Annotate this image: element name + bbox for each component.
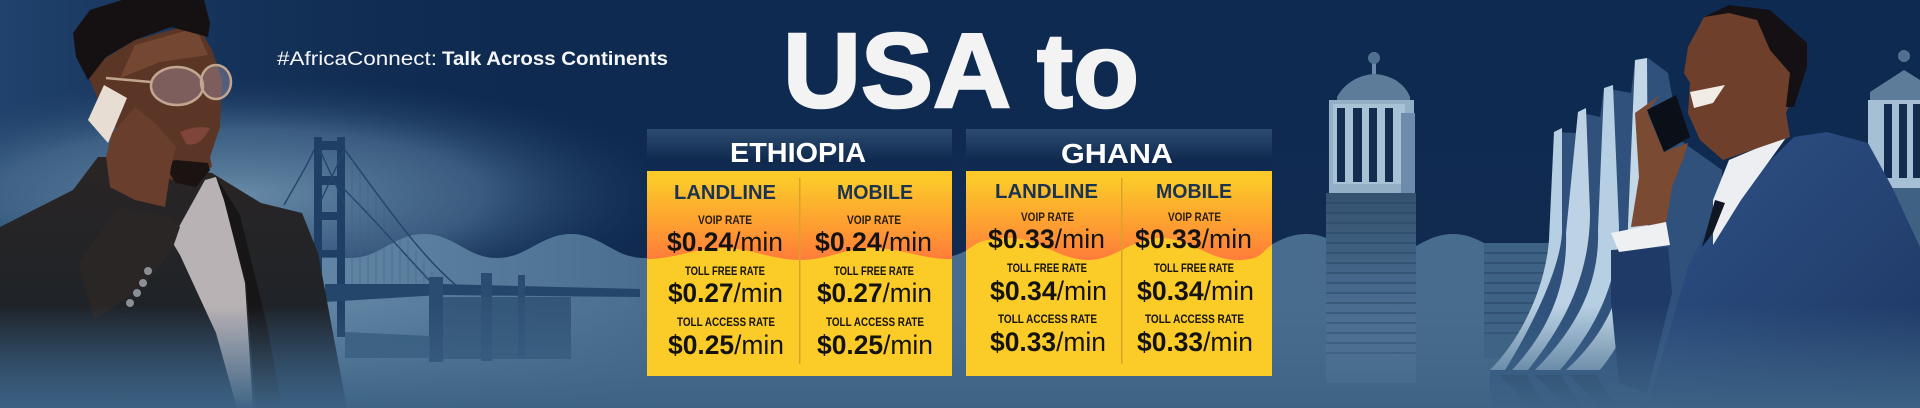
face and neck [86, 23, 222, 180]
Ghana landline column: $0.34/min [990, 276, 1107, 306]
forearm sleeve [78, 207, 180, 320]
Ghana header: GHANA [1061, 138, 1173, 169]
coat [0, 157, 347, 408]
Ethiopia mobile column: VOIP RATE [847, 215, 901, 227]
Ethiopia header [647, 129, 952, 171]
face [1684, 10, 1796, 160]
Ethiopia landline column: TOLL ACCESS RATE [677, 317, 775, 329]
Ghana landline column: VOIP RATE [1021, 212, 1074, 224]
illustration: Ethiopian tower right [1868, 50, 1920, 368]
Ghana landline column: $0.33/min [990, 327, 1106, 357]
hand [106, 107, 176, 207]
phone [88, 85, 127, 143]
background: left sky glow [0, 0, 680, 315]
Ethiopia mobile column: TOLL ACCESS RATE [826, 317, 924, 329]
Ghana card background [966, 171, 1272, 376]
Ghana mobile column: TOLL FREE RATE [1154, 263, 1234, 275]
Ghana landline column: TOLL FREE RATE [1007, 263, 1087, 275]
smile [1690, 85, 1725, 108]
Ethiopia mobile column: TOLL FREE RATE [834, 266, 914, 278]
tagline: Talk Across Continents [442, 49, 668, 70]
hair [1704, 5, 1807, 107]
cuff [1611, 222, 1670, 252]
Ghana mobile column: MOBILE [1156, 181, 1232, 203]
Ethiopia landline column: TOLL FREE RATE [685, 266, 765, 278]
forehead highlight [120, 28, 208, 78]
Ethiopia landline column [667, 182, 784, 360]
Ethiopia landline column: LANDLINE [674, 182, 776, 204]
panel: Ethiopia rates [647, 129, 952, 376]
Ethiopia mobile column: $0.24/min [815, 227, 932, 257]
background: wave band [0, 234, 1920, 408]
Ghana mobile column: $0.34/min [1137, 276, 1254, 306]
Ghana landline column: LANDLINE [995, 181, 1098, 203]
Ethiopia landline column: VOIP RATE [698, 215, 752, 227]
glasses [106, 65, 231, 105]
phone [1647, 95, 1690, 152]
illustration: Ethiopian low building [1484, 243, 1556, 358]
Ghana landline column [988, 181, 1107, 357]
person: right man on phone [1611, 5, 1920, 408]
Ethiopia mobile column: $0.25/min [817, 330, 933, 360]
Ethiopia mobile column: MOBILE [837, 182, 913, 204]
beard [163, 160, 210, 187]
Ghana header [966, 129, 1272, 171]
title: USA to [783, 12, 1139, 130]
shirt [1713, 135, 1788, 245]
Ghana mobile column: VOIP RATE [1168, 212, 1221, 224]
Ghana mobile column: TOLL ACCESS RATE [1145, 314, 1244, 326]
illustration: Golden Gate bridge [284, 137, 640, 362]
Ethiopia card background [647, 171, 952, 376]
Ethiopia mobile column: $0.27/min [817, 278, 932, 308]
Ethiopia landline column: $0.24/min [667, 227, 783, 257]
bottom fade overlay [0, 305, 1920, 408]
Ghana mobile column: $0.33/min [1135, 224, 1252, 254]
tagline [277, 49, 668, 70]
Ghana landline column: TOLL ACCESS RATE [998, 314, 1097, 326]
scarf lapel [216, 177, 282, 408]
tagline: #AfricaConnect: [277, 49, 437, 70]
cuff buttons [126, 267, 152, 307]
panel: Ghana rates [966, 129, 1272, 376]
illustration: Ethiopian tower left [1326, 52, 1416, 383]
forearm and hand [1631, 95, 1688, 227]
Ethiopia header: ETHIOPIA [730, 137, 866, 168]
Ethiopia landline column: $0.25/min [668, 330, 784, 360]
tie [1702, 200, 1725, 247]
hair [73, 0, 210, 80]
sleeve [1611, 247, 1672, 393]
shirt [171, 177, 253, 408]
Ghana mobile column [1135, 181, 1254, 357]
Ethiopia mobile column [815, 182, 933, 360]
Ethiopia landline column: $0.27/min [668, 278, 783, 308]
Ghana landline column: $0.33/min [988, 224, 1105, 254]
Ghana mobile column: $0.33/min [1137, 327, 1253, 357]
suit body [1647, 132, 1920, 408]
illustration: swooping arch monument [1490, 58, 1722, 408]
lips [180, 127, 210, 145]
person: left man on phone [0, 0, 347, 408]
